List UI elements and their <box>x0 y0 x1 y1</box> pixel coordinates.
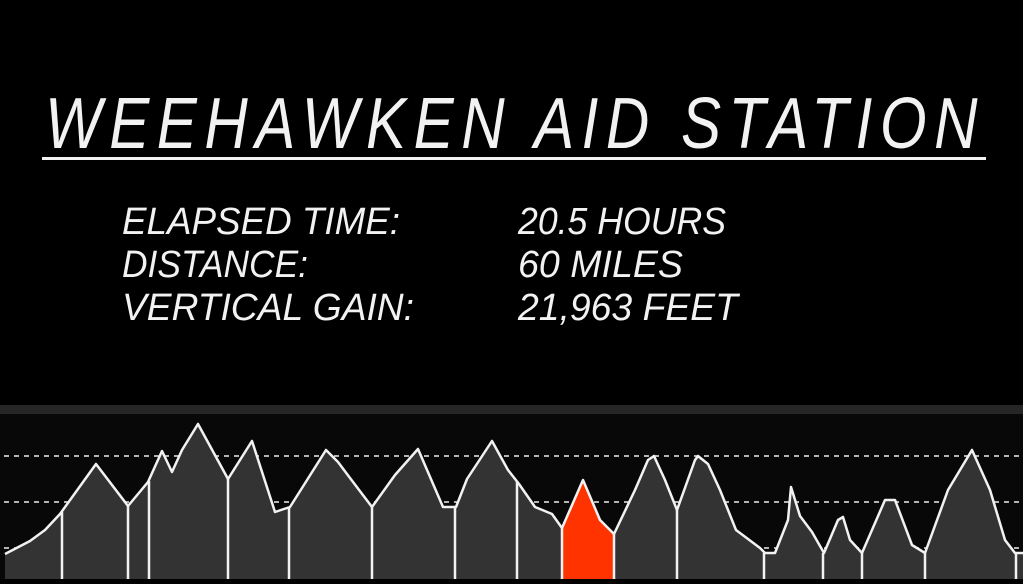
highlighted segment: Weehawken <box>562 480 614 579</box>
stat: elapsed time <box>122 201 726 243</box>
stat: elapsed time: 20.5 HOURS <box>517 201 726 243</box>
stat: distance: DISTANCE: <box>122 244 308 286</box>
elevation profile chart <box>0 405 1023 579</box>
stat: elapsed time: ELAPSED TIME: <box>122 201 400 243</box>
stat: vertical gain <box>122 287 741 329</box>
profile area <box>5 424 1023 579</box>
stat: vertical gain: 21,963 FEET <box>517 287 741 329</box>
stat: distance: 60 MILES <box>518 244 683 286</box>
stat: distance <box>122 244 683 286</box>
stats block <box>122 201 741 329</box>
stat: vertical gain: VERTICAL GAIN: <box>122 287 414 329</box>
